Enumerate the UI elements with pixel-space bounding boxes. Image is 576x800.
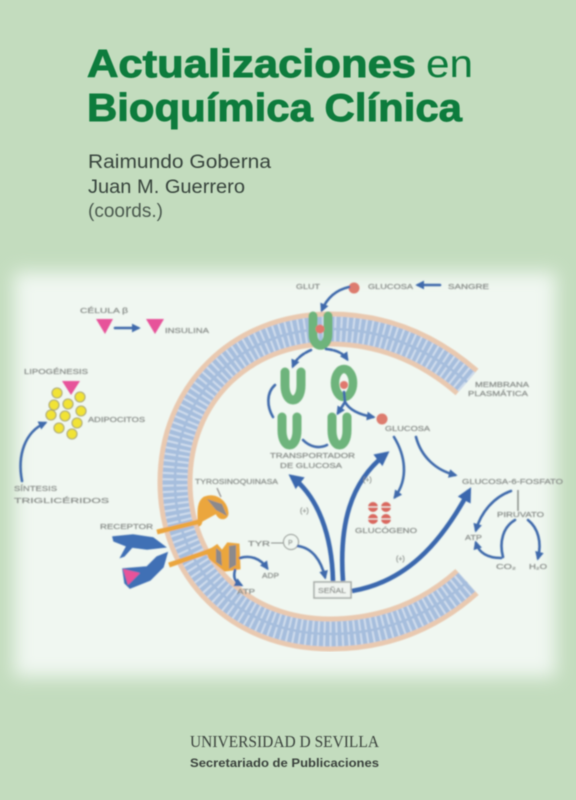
authors: Raimundo Goberna xyxy=(88,152,271,173)
title: Bioquímica Clínica xyxy=(87,87,462,130)
label: síntesis triglicéridos: TRIGLICÉRIDOS xyxy=(14,496,110,505)
adipocyte cluster: ADIPOCITOS xyxy=(88,417,145,424)
signal arrows xyxy=(292,437,469,591)
receptor: RECEPTOR xyxy=(100,524,153,531)
top legend: glut glucosa sangre xyxy=(296,282,489,310)
glycolysis branch: PIRUVATO xyxy=(497,512,545,519)
intracellular glucose xyxy=(376,414,430,433)
plus labels: (+) xyxy=(363,477,372,484)
phosphorylation labels: ATP xyxy=(237,589,255,596)
label: membrana plasmática: MEMBRANA xyxy=(475,382,529,389)
glucose transporters xyxy=(268,316,373,470)
glycolysis branch: H₂O xyxy=(529,564,548,571)
glucose transporters: TRANSPORTADOR xyxy=(270,453,355,460)
phosphorylation labels xyxy=(234,534,298,596)
phosphorylation labels: P xyxy=(288,540,293,547)
glycogen: GLUCÓGENO xyxy=(355,526,418,535)
glucose transporters: DE GLUCOSA xyxy=(280,463,342,470)
beta cell and insulin: INSULINA xyxy=(165,328,209,335)
adipocyte cluster xyxy=(24,367,145,439)
title: Actualizaciones xyxy=(87,43,416,86)
publisher: UNIVERSIDAD D SEVILLA xyxy=(190,732,380,751)
arrow: triglyceride synthesis to adipocyte xyxy=(21,423,45,481)
glycolysis branch: GLUCOSA-6-FOSFATO xyxy=(462,479,564,486)
top legend: glut glucosa sangre: SANGRE xyxy=(448,284,489,291)
label: membrana plasmática xyxy=(468,382,529,398)
adipocyte cluster: LIPOGÉNESIS xyxy=(24,367,88,376)
signal box xyxy=(314,582,351,598)
title xyxy=(87,43,473,130)
signal box: SEÑAL xyxy=(318,586,346,595)
authors: Juan M. Guerrero xyxy=(88,177,245,198)
glycolysis branch: CO₂ xyxy=(496,564,516,571)
glycolysis branch: ATP xyxy=(465,535,482,542)
metabolic diagram xyxy=(14,282,564,634)
label: síntesis triglicéridos xyxy=(14,484,110,505)
receptor xyxy=(100,524,167,588)
top legend: glut glucosa sangre: GLUT xyxy=(296,284,321,291)
label: membrana plasmática: PLASMÁTICA xyxy=(468,389,528,398)
plus labels xyxy=(300,477,405,563)
tyrosine kinase xyxy=(157,479,278,570)
glycolysis branch xyxy=(462,479,564,571)
panel: diagram background xyxy=(14,272,556,677)
label: síntesis triglicéridos: SÍNTESIS xyxy=(14,484,57,493)
plus labels: (+) xyxy=(396,556,405,563)
phosphorylation labels: ADP xyxy=(262,573,279,580)
publisher xyxy=(190,732,380,770)
authors: (coords.) xyxy=(88,201,163,222)
intracellular glucose: GLUCOSA xyxy=(385,426,430,433)
title: en xyxy=(426,43,473,86)
glycogen xyxy=(355,502,418,535)
authors xyxy=(88,152,271,222)
tyrosine kinase: TYROSINOQUINASA xyxy=(195,479,278,486)
plasma membrane xyxy=(175,329,467,634)
beta cell and insulin: CÉLULA β xyxy=(80,306,128,315)
plus labels: (+) xyxy=(300,508,309,515)
beta cell and insulin xyxy=(80,306,209,335)
top legend: glut glucosa sangre: GLUCOSA xyxy=(368,284,413,291)
publisher: Secretariado de Publicaciones xyxy=(190,756,379,770)
phosphorylation labels: TYR xyxy=(248,541,270,548)
